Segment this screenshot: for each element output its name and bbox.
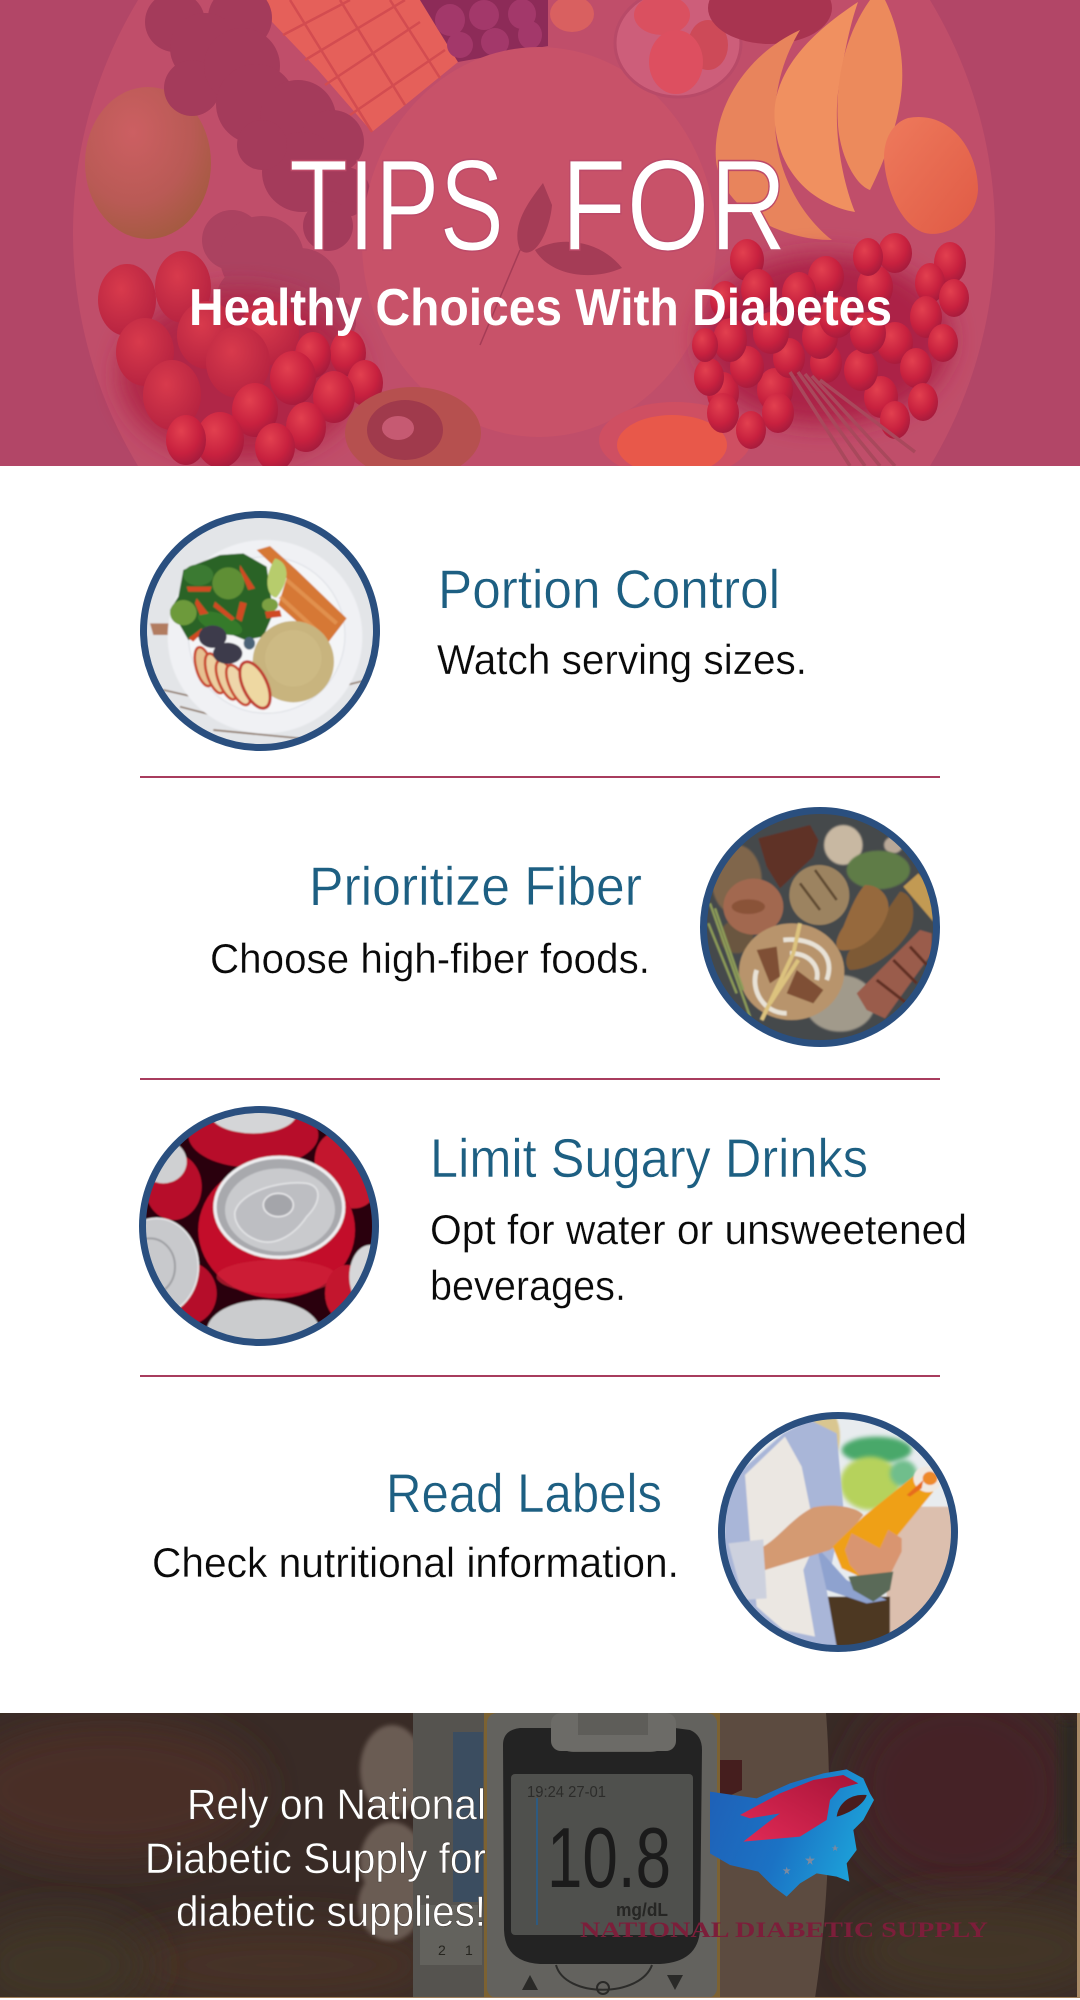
call to action text: Diabetic Supply for: [145, 1835, 486, 1883]
right fruit shadow: [700, 255, 950, 425]
icon: red berries: [692, 233, 969, 449]
icon: bananas: [716, 0, 902, 240]
icon: red soda cans: [139, 1106, 379, 1346]
panel: tip 2 prioritize fiber: [210, 803, 947, 1057]
call to action text: diabetic supplies!: [176, 1888, 486, 1936]
icon: kiwi: [345, 387, 481, 466]
icon: grapefruit: [599, 402, 748, 466]
dark fruit at top: [708, 0, 832, 44]
glucose meter: [484, 1713, 720, 1998]
icon: vegetable stalks: [790, 372, 915, 466]
description: Opt for water or unsweetened: [430, 1206, 967, 1253]
hand behind meter: [716, 1713, 829, 1998]
heading: Portion Control: [438, 558, 780, 620]
description: beverages.: [430, 1262, 626, 1309]
insulin pen: 2: [438, 1942, 446, 1958]
icon: whole grain breads: [700, 807, 940, 1047]
icon: mango: [884, 117, 978, 234]
glucose meter: 19:24 27-01: [527, 1784, 606, 1801]
icon: almond bowl: [615, 0, 741, 97]
footer photograph of glucose meter with dark overlay: [0, 1690, 1080, 2000]
description: Choose high-fiber foods.: [210, 935, 650, 982]
panel: header banner: [0, 0, 1080, 466]
call to action text: [145, 1781, 486, 1936]
heading: Read Labels: [386, 1462, 662, 1524]
description: Check nutritional information.: [152, 1539, 679, 1586]
icon: blueberries: [420, 0, 548, 62]
logo wordmark: NATIONAL DIABETIC SUPPLY: [580, 1917, 988, 1942]
icon: apple: [85, 87, 211, 239]
insulin pen: 1: [465, 1942, 473, 1958]
glucose meter: mg/dL: [616, 1900, 668, 1920]
call to action text: Rely on National: [187, 1781, 486, 1829]
left fruit shadow: [120, 290, 360, 460]
header food photograph with rose overlay: [0, 0, 1080, 466]
panel: tip 3 limit sugary drinks: [139, 1106, 964, 1346]
description: Watch serving sizes.: [437, 636, 807, 683]
logo emblem: [710, 1769, 874, 1897]
panel: footer banner: [0, 1690, 1080, 2000]
subtitle: Healthy Choices With Diabetes: [189, 279, 892, 337]
icon: strawberries: [98, 251, 299, 430]
icon: almond: [550, 0, 594, 32]
icon: orange squares: [251, 0, 458, 132]
glucose meter: 10.8: [547, 1811, 671, 1906]
heading: Prioritize Fiber: [309, 855, 642, 917]
description: [430, 1206, 967, 1309]
title: TIPS: [289, 132, 504, 278]
icon: tomatoes: [166, 330, 383, 471]
fingers: [356, 1723, 413, 1942]
heading: Limit Sugary Drinks: [430, 1127, 868, 1189]
icon: woman reading bottle label: [718, 1412, 958, 1652]
insulin pen: [413, 1713, 485, 1998]
icon: leaf: [480, 183, 622, 345]
icon: plate of salmon, greens, quinoa and apple: [140, 511, 380, 751]
icon: broccoli: [145, 0, 370, 346]
inner plate well: [366, 47, 542, 204]
title: [289, 132, 787, 278]
shadow between fingers: [720, 1760, 742, 1795]
panel: tip 4 read labels: [152, 1407, 967, 1660]
logo: National Diabetic Supply: [580, 1769, 988, 1942]
panel: tip 1 portion control: [133, 507, 807, 760]
title: FOR: [561, 132, 787, 278]
